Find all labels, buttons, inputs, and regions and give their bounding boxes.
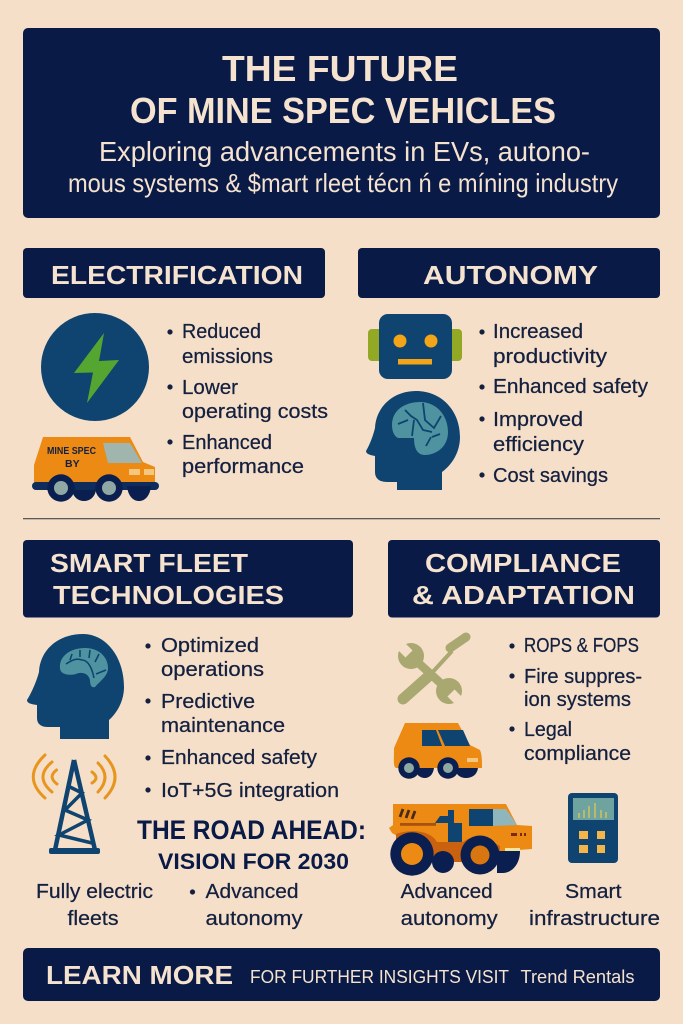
vision item: advanced autonomy bullet: Advanced [206, 881, 298, 903]
vision item: smart infrastructure: infrastructure [529, 908, 660, 930]
icon: head with brain [366, 391, 460, 490]
list: compliance items: Legal [524, 719, 572, 741]
icon: mine spec van: MINE SPEC [47, 445, 96, 457]
vision item: fully electric fleets: Fully electric [36, 881, 153, 903]
list: smart fleet benefits [146, 635, 339, 802]
list: smart fleet benefits: operations [161, 659, 264, 681]
vision item: advanced autonomy: Advanced [401, 881, 493, 903]
icon: signal tower [33, 755, 115, 854]
list: compliance items: ROPS & FOPS [524, 635, 639, 657]
list: electrification benefits: Enhanced [182, 432, 272, 454]
list: autonomy benefits: Enhanced safety [493, 376, 648, 398]
list: compliance items [510, 635, 642, 765]
list: compliance items: compliance [524, 743, 631, 765]
heading: electrification [23, 248, 325, 298]
icon: robot [368, 314, 462, 379]
list: smart fleet benefits: maintenance [161, 715, 285, 737]
list: smart fleet benefits: Enhanced safety [161, 747, 317, 769]
list: smart fleet benefits: Predictive [161, 691, 255, 713]
list: electrification benefits: Reduced [182, 321, 261, 343]
vision item: advanced autonomy bullet: autonomy [206, 908, 302, 930]
vision item: fully electric fleets: fleets [68, 908, 118, 930]
icon: mining truck [389, 804, 532, 876]
heading: autonomy [358, 248, 660, 298]
heading: the road ahead [137, 815, 366, 874]
title banner [23, 28, 660, 218]
call to action bar: FOR FURTHER INSIGHTS VISIT [250, 967, 509, 987]
title [130, 48, 556, 131]
list: smart fleet benefits: Optimized [161, 635, 259, 657]
subtitle [68, 136, 618, 198]
heading: compliance and adaptation: & ADAPTATION [412, 580, 635, 610]
heading: autonomy: AUTONOMY [423, 260, 598, 290]
list: autonomy benefits: efficiency [493, 434, 584, 456]
vision item: advanced autonomy: autonomy [401, 908, 498, 930]
heading: smart fleet technologies: SMART FLEET [50, 548, 248, 578]
list: electrification benefits: operating costs [182, 401, 328, 423]
list: electrification benefits: Lower [182, 377, 238, 399]
subtitle: Exploring advancements in EVs, autono- [99, 136, 590, 167]
vision item: fully electric fleets [36, 881, 153, 930]
list: electrification benefits: emissions [182, 346, 273, 368]
subtitle: mous systems & $mart rleet técn ń e míning industry [68, 168, 618, 198]
heading: compliance and adaptation: COMPLIANCE [425, 548, 621, 578]
call to action bar: LEARN MORE [46, 960, 233, 990]
list: compliance items: Fire suppres- [524, 666, 642, 688]
heading: electrification: ELECTRIFICATION [51, 260, 303, 290]
icon: mine spec van: BY [65, 458, 80, 470]
icon: mine spec van [32, 437, 159, 502]
list: electrification benefits [168, 321, 328, 478]
list: compliance items: ion systems [524, 689, 631, 711]
list: autonomy benefits: Cost savings [493, 465, 608, 487]
icon: head with brain [27, 634, 124, 739]
icon: wrench and screwdriver [396, 637, 466, 706]
call to action bar [23, 948, 660, 1001]
heading: smart fleet technologies: TECHNOLOGIES [53, 580, 284, 610]
icon: orange car [394, 723, 482, 779]
vision item: advanced autonomy bullet [190, 881, 302, 930]
list: autonomy benefits: productivity [493, 346, 607, 368]
list: autonomy benefits: Improved [493, 409, 583, 431]
heading: compliance and adaptation [388, 540, 660, 618]
vision item: advanced autonomy [401, 881, 498, 930]
title: OF MINE SPEC VEHICLES [130, 90, 556, 131]
vision item: smart infrastructure [529, 881, 660, 930]
list: autonomy benefits [480, 321, 648, 487]
list: smart fleet benefits: IoT+5G integration [161, 780, 339, 802]
vision item: smart infrastructure: Smart [565, 881, 622, 903]
list: electrification benefits: performance [182, 456, 304, 478]
title: THE FUTURE [222, 48, 458, 89]
heading: the road ahead: THE ROAD AHEAD: [137, 815, 366, 845]
call to action bar: Trend Rentals [520, 967, 634, 987]
heading: the road ahead: VISION FOR 2030 [158, 849, 349, 874]
heading: smart fleet technologies [23, 540, 353, 618]
list: autonomy benefits: Increased [493, 321, 583, 343]
icon: lightning bolt [41, 313, 149, 421]
icon: calculator device [568, 793, 618, 863]
